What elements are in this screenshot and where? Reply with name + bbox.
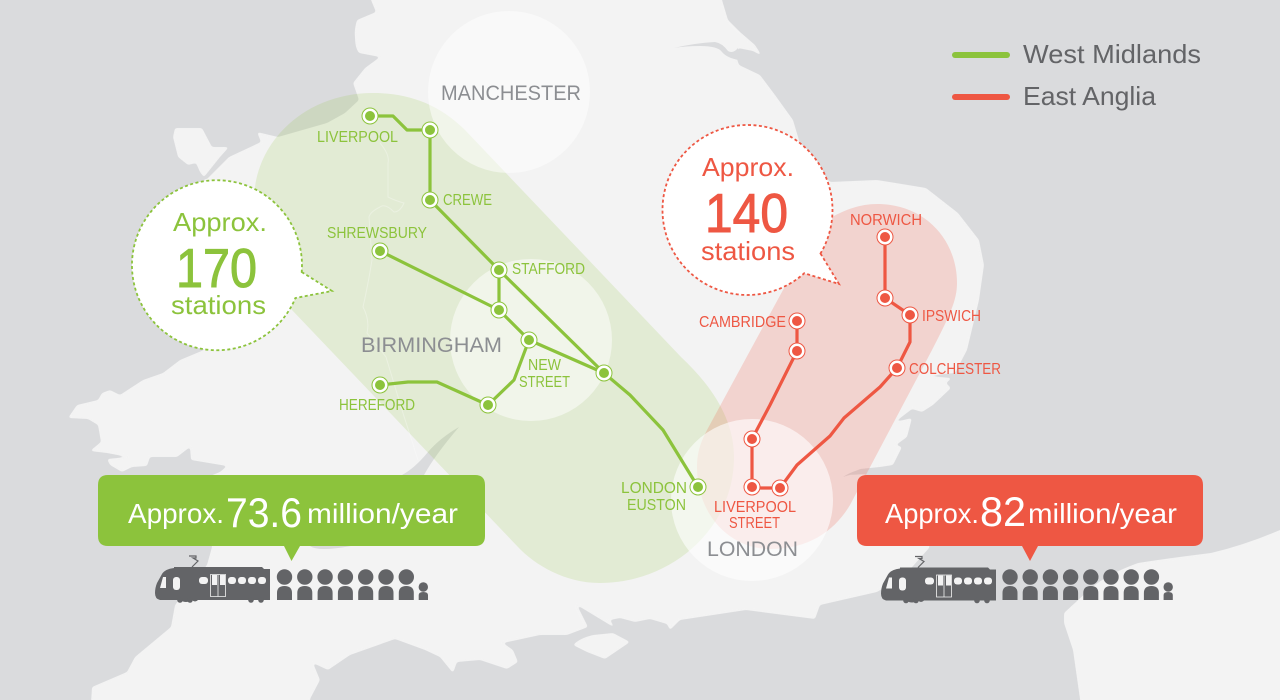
callout: 170 stations: 170	[176, 237, 257, 299]
ridership box: East Anglia: Approx.	[885, 498, 979, 529]
ridership box: East Anglia: 82	[980, 488, 1026, 535]
station labels: East Anglia	[699, 212, 1001, 532]
region: West Midlands area	[255, 93, 734, 583]
station labels: West Midlands: NEW	[528, 357, 562, 374]
station labels: East Anglia: CAMBRIDGE	[699, 314, 786, 331]
city circle: Birmingham	[450, 259, 612, 421]
city label: Birmingham: BIRMINGHAM	[361, 334, 502, 357]
station labels: East Anglia: COLCHESTER	[909, 361, 1001, 378]
callout: 140 stations	[662, 125, 839, 295]
region: East Anglia area	[697, 204, 957, 549]
callout: 170 stations: stations	[171, 290, 266, 320]
legend: West Midlands	[1023, 39, 1201, 69]
station labels: West Midlands: LIVERPOOL	[317, 129, 398, 146]
icon: train and people, West Midlands	[155, 556, 428, 603]
route network: East Anglia	[744, 229, 918, 496]
station labels: East Anglia: STREET	[729, 515, 780, 532]
station labels: West Midlands	[317, 129, 687, 514]
city circle: Manchester	[428, 11, 590, 173]
ridership box: West Midlands: Approx.	[128, 498, 224, 529]
city label: Manchester: MANCHESTER	[441, 82, 581, 105]
city label: London: LONDON	[707, 538, 798, 561]
station labels: West Midlands: STAFFORD	[512, 261, 585, 278]
ridership box: East Anglia: million/year	[1028, 498, 1177, 529]
station labels: West Midlands: STREET	[519, 374, 570, 391]
station labels: West Midlands: CREWE	[443, 192, 492, 209]
callout: 140 stations: Approx.	[702, 152, 794, 182]
ridership box: East Anglia	[857, 475, 1203, 561]
ridership box: West Midlands: 73.6	[226, 489, 302, 536]
callout: 140 stations: 140	[705, 182, 788, 244]
station labels: West Midlands: LONDON	[621, 480, 687, 497]
callout: 170 stations: Approx.	[173, 207, 267, 237]
ridership box: West Midlands	[98, 475, 485, 561]
legend: East Anglia	[1023, 81, 1157, 111]
station labels: East Anglia: LIVERPOOL	[714, 499, 796, 516]
city circle: London	[671, 419, 833, 581]
map: river inlets	[310, 42, 868, 549]
ridership box: West Midlands: million/year	[307, 498, 458, 529]
station labels: West Midlands: EUSTON	[627, 497, 686, 514]
legend	[952, 39, 1201, 111]
icon: train and people, East Anglia	[881, 556, 1173, 603]
route network: West Midlands	[362, 108, 706, 495]
station labels: West Midlands: SHREWSBURY	[327, 225, 427, 242]
callout: 170 stations	[132, 180, 332, 350]
callout: 140 stations: stations	[701, 236, 795, 266]
station labels: East Anglia: NORWICH	[850, 212, 922, 229]
station labels: West Midlands: HEREFORD	[339, 397, 415, 414]
station labels: East Anglia: IPSWICH	[922, 308, 981, 325]
